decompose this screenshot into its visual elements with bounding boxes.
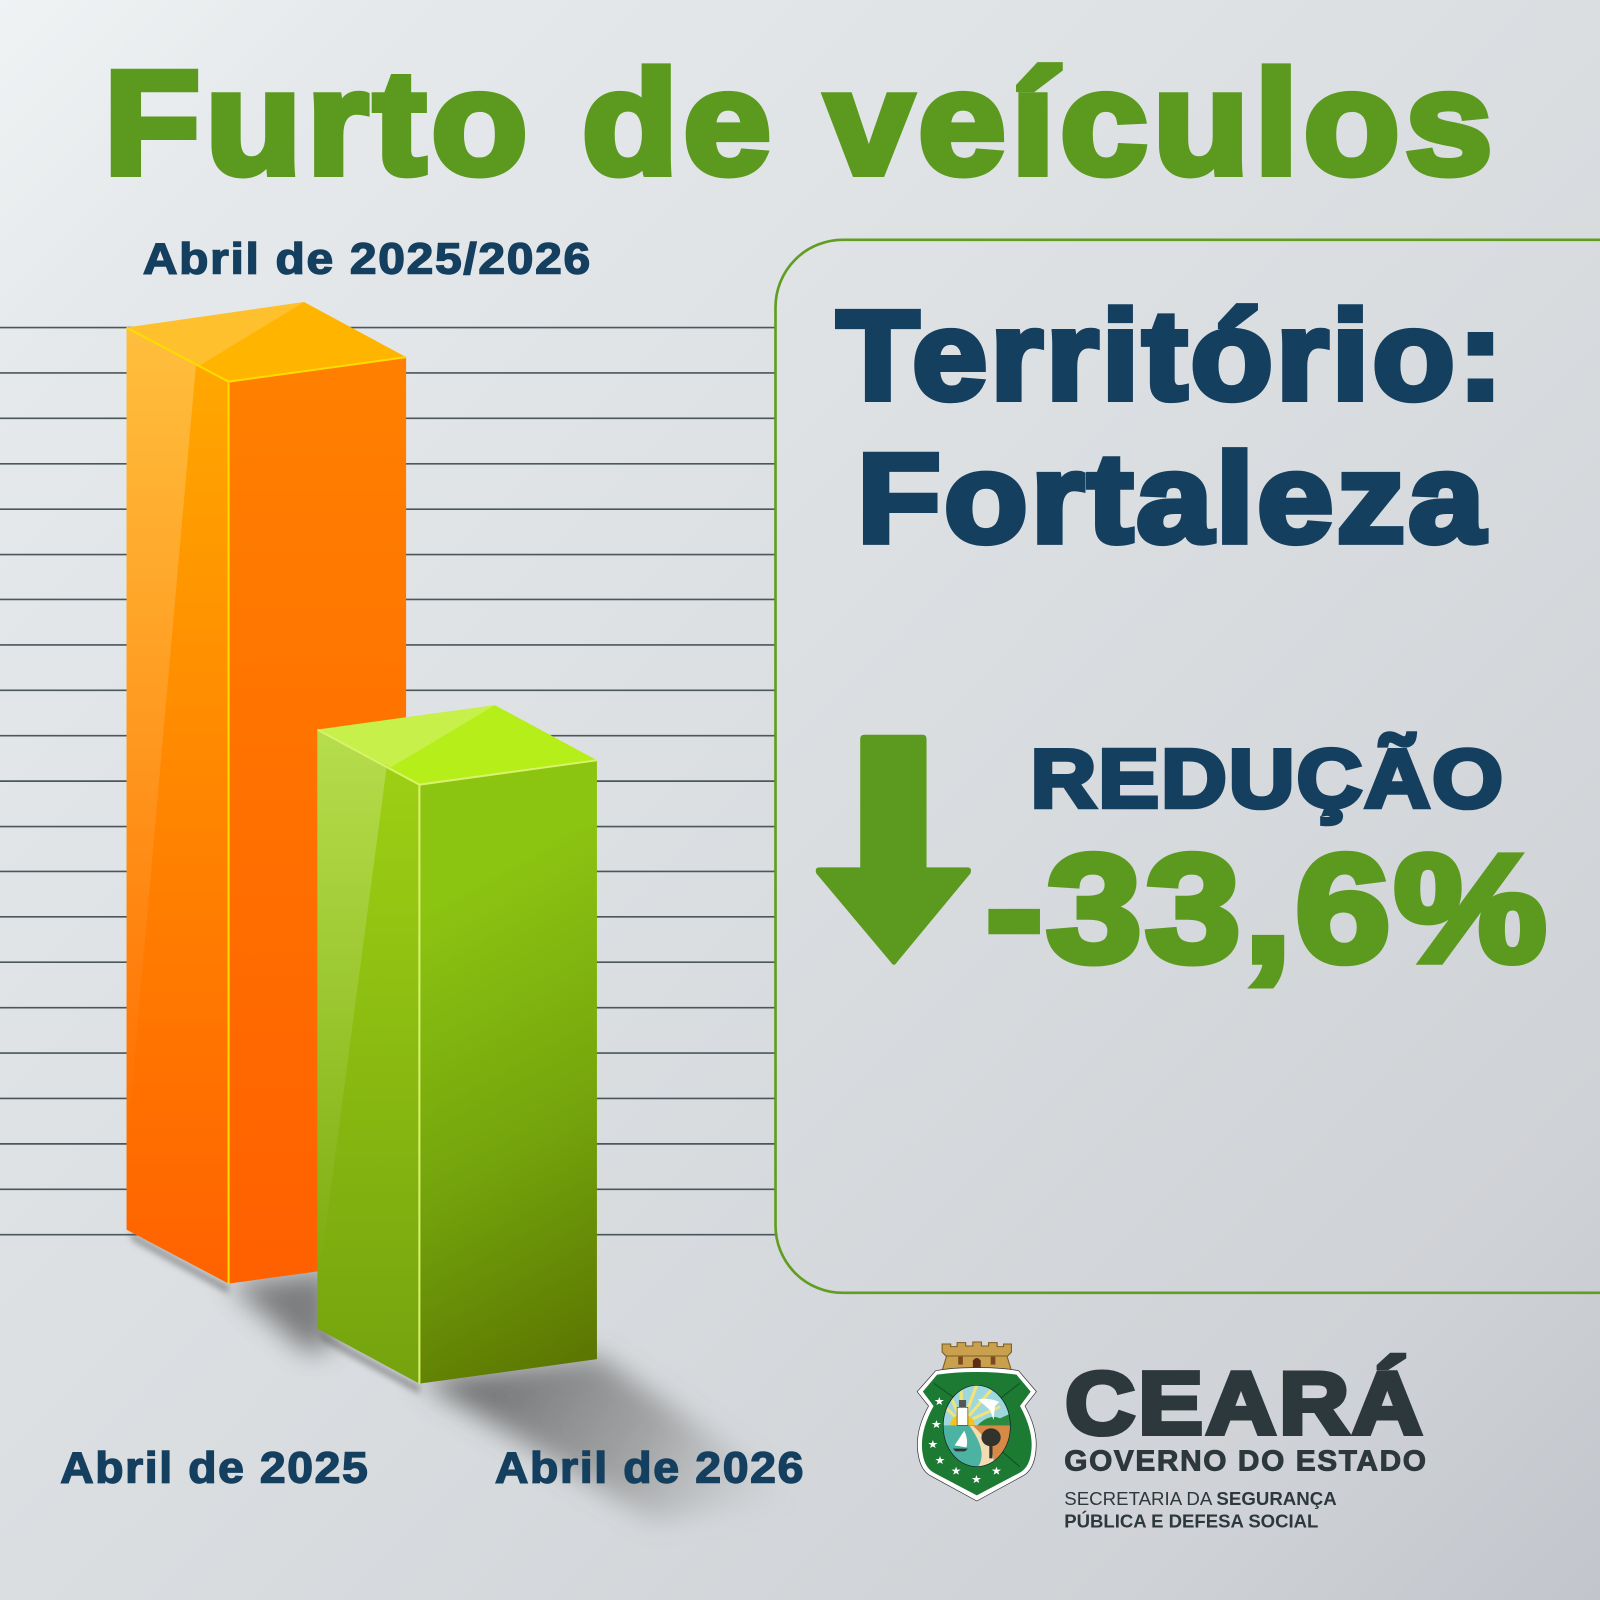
oval emblem [943,1383,1011,1469]
heading: Território: Território: [837,284,1506,426]
chart gridlines [0,328,776,1235]
icon: down arrow [816,735,971,965]
panel: território [776,240,1600,1293]
icon: state coat of arms [917,1342,1036,1501]
wordmark: secretaria: SECRETARIA DA SEGURANÇA [1064,1488,1337,1509]
heading: Fortaleza: Fortaleza [857,427,1488,569]
title: Furto de veículos [104,41,1498,205]
bar: Abril de 2025 (orange) [127,302,406,1284]
castle crown [942,1342,1011,1371]
wordmark: pública e defesa social: PÚBLICA E DEFESA SOCIAL [1064,1511,1318,1532]
label: Abril de 2025: Abril de 2025 [60,1444,369,1493]
label: Abril de 2026: Abril de 2026 [495,1444,805,1493]
label: redução: REDUÇÃO [1031,732,1505,825]
wordmark: governo do estado: GOVERNO DO ESTADO [1064,1445,1428,1477]
shield [917,1368,1036,1501]
logo: Governo do Ceará [917,1342,1428,1532]
value: -33,6%: -33,6% [986,823,1550,994]
bar: Abril de 2026 (green) [317,705,597,1384]
wordmark: CEARÁ: CEARÁ [1065,1355,1426,1453]
chart subtitle: Abril de 2025/2026 [143,234,592,283]
bar shadows [129,1231,806,1520]
stars [928,1397,1001,1483]
